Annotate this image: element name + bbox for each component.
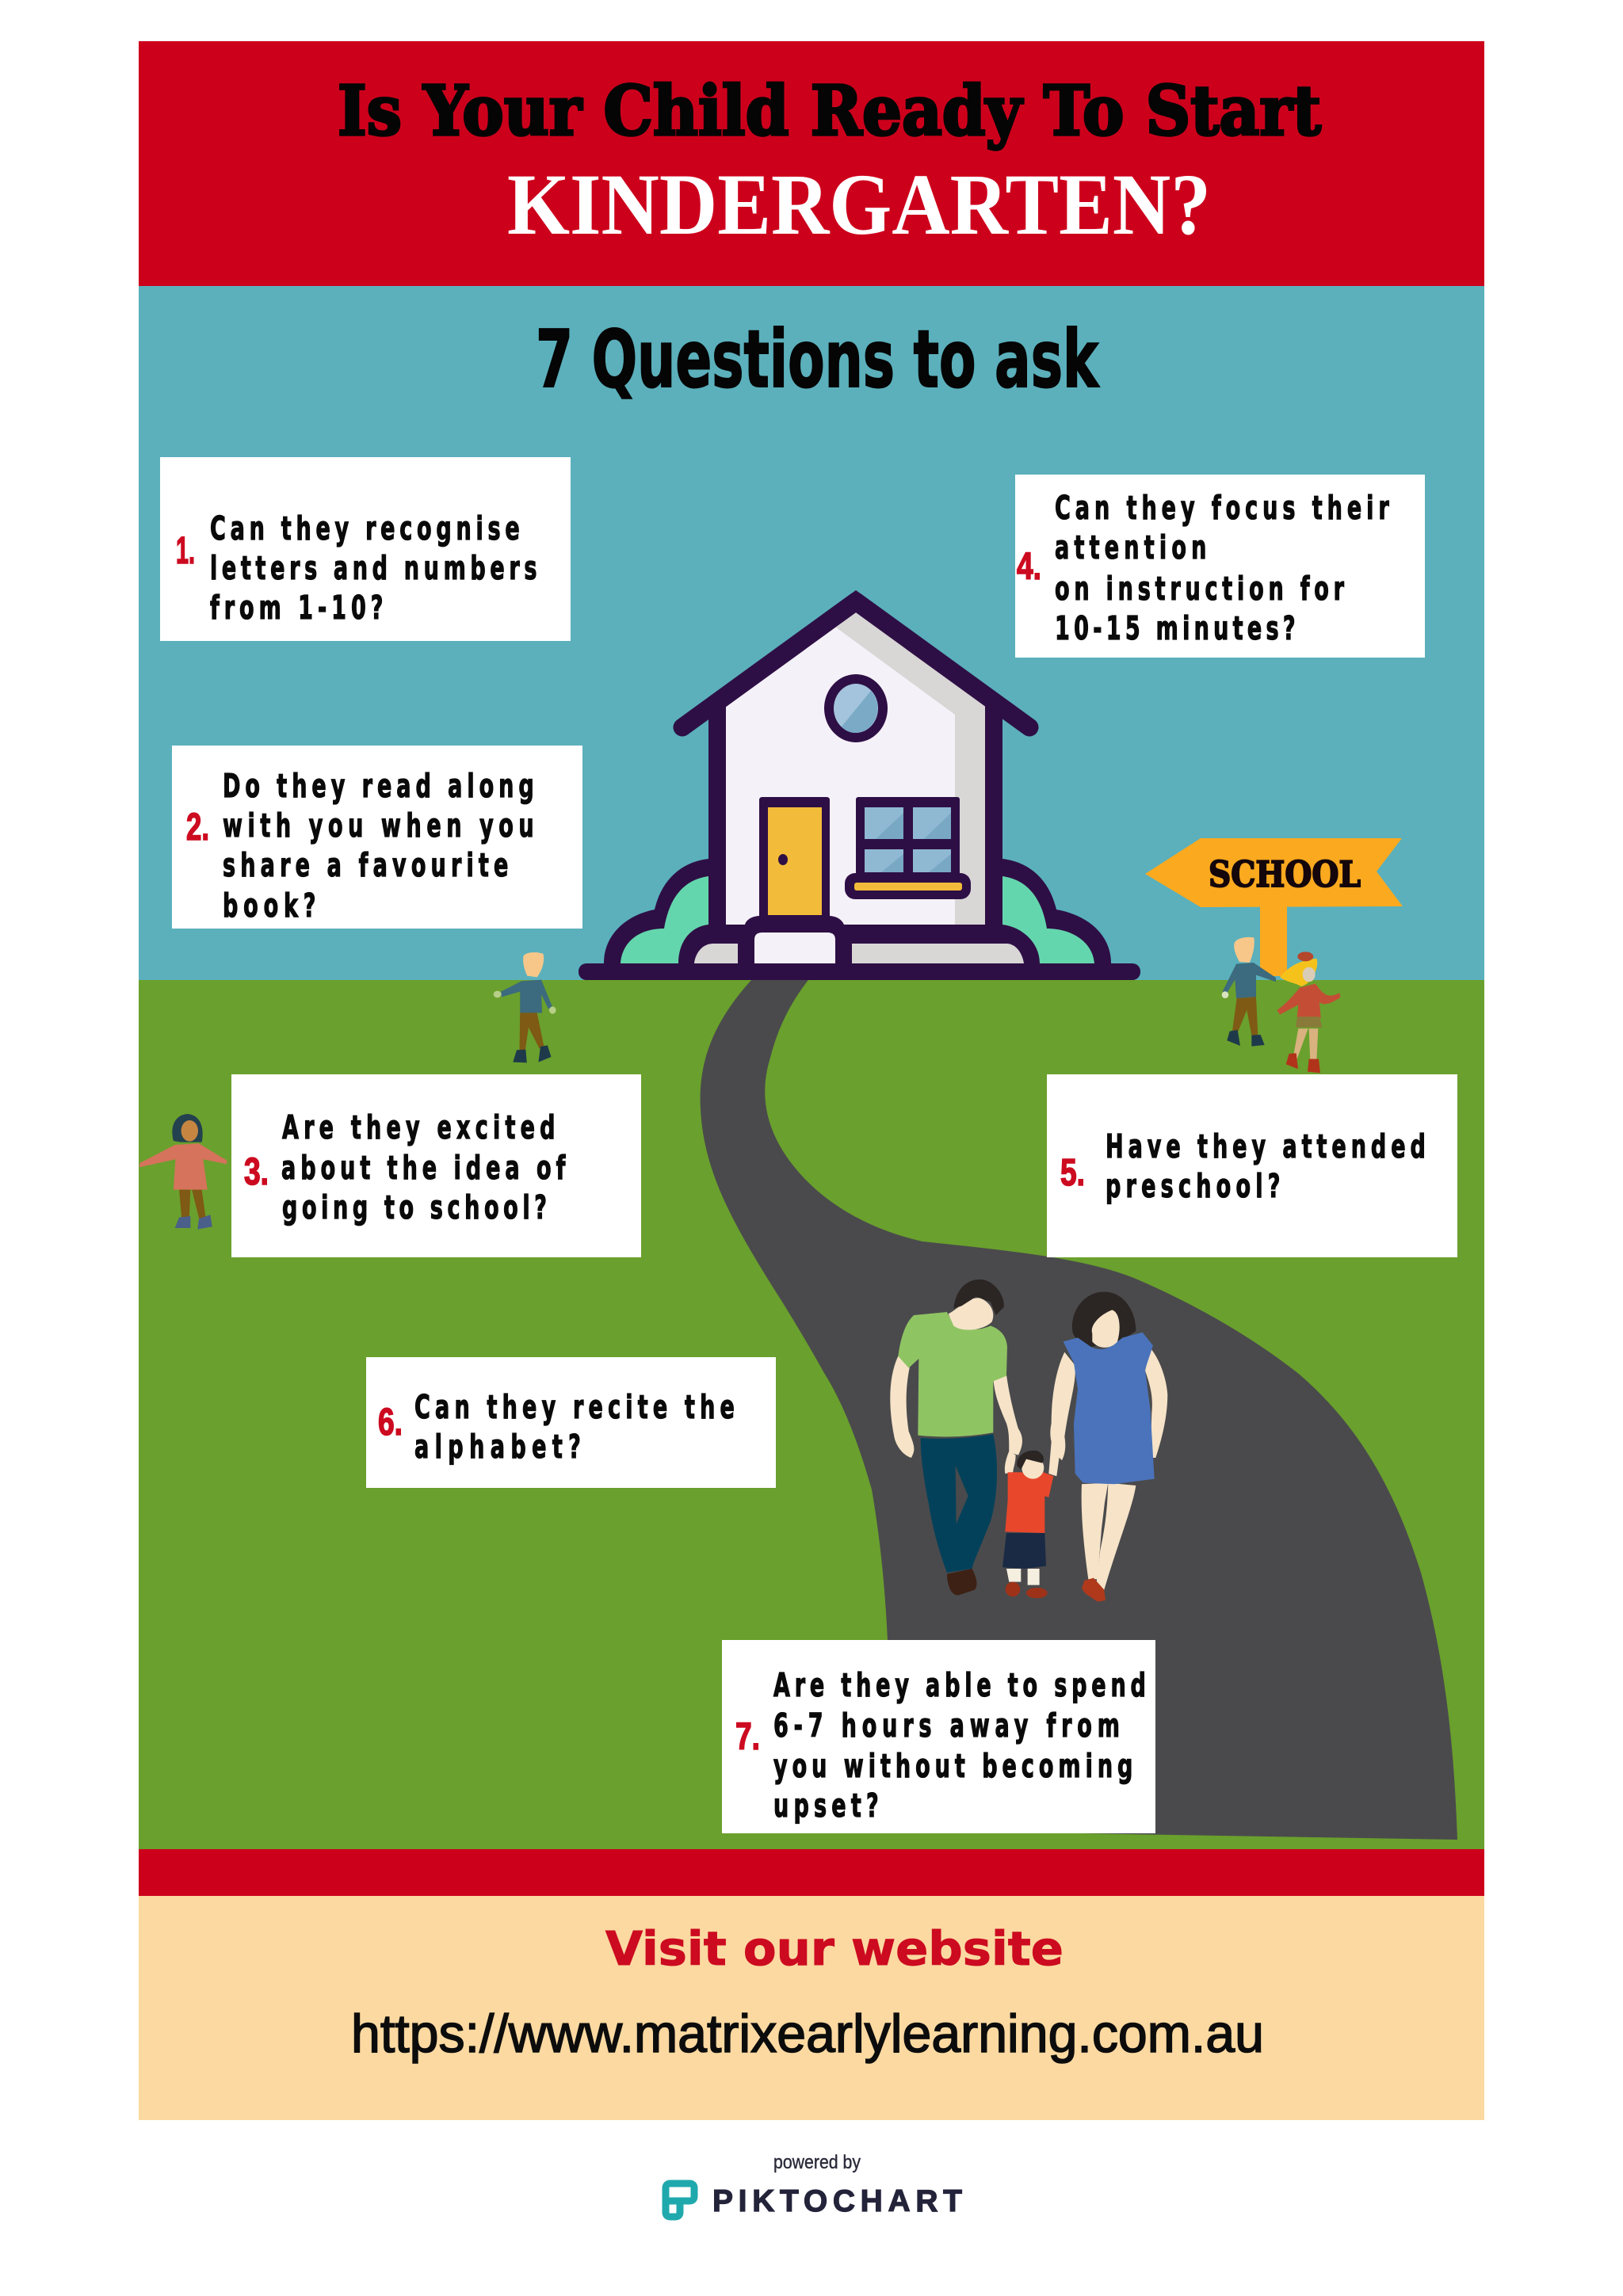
text (1106, 1128, 1426, 1206)
text (281, 1109, 566, 1227)
text (773, 1667, 1146, 1825)
number 2: 2. (186, 807, 209, 849)
text: Can they recite the (414, 1389, 735, 1427)
bushes (604, 859, 1111, 963)
card: question 6 (366, 1357, 776, 1488)
text: going to school? (282, 1189, 547, 1227)
text: letters and numbers (210, 550, 537, 588)
heading: visit our website: Visit our website (605, 1921, 1064, 1976)
piktochart wordmark: PIKTOCHART (712, 2184, 962, 2218)
card: question 3 (231, 1074, 641, 1257)
illustration: boy near sign (1222, 937, 1276, 1047)
number 4: 4. (1017, 546, 1041, 588)
text: share a favourite (223, 847, 508, 885)
text: preschool? (1106, 1168, 1280, 1206)
powered by: powered by (773, 2152, 861, 2173)
panel: sky (139, 286, 1484, 980)
text: Are they able to spend (773, 1667, 1146, 1705)
text: 6-7 hours away from (773, 1707, 1120, 1745)
text: Are they excited (282, 1109, 556, 1147)
illustration: girl near sign (1277, 952, 1341, 1073)
card: question 7 (722, 1640, 1155, 1833)
panel: website footer (139, 1896, 1484, 2120)
ground line (579, 963, 1140, 980)
text: Can they recognise (210, 510, 520, 548)
text (1055, 490, 1389, 648)
door (759, 797, 830, 919)
illustration: family walking (890, 1280, 1167, 1602)
text: Can they focus their (1055, 490, 1389, 528)
walls (708, 590, 1002, 931)
subtitle: 7 Questions to ask (536, 313, 1100, 406)
card: question 1 (160, 457, 571, 641)
text: about the idea of (281, 1150, 566, 1188)
steps and foundation (678, 916, 1040, 963)
number 5: 5. (1060, 1152, 1085, 1194)
text: book? (223, 887, 315, 925)
title: first line: Is Your Child Ready To Start (338, 71, 1321, 151)
number 1: 1. (176, 530, 195, 572)
text: from 1-10? (210, 589, 383, 627)
text (414, 1389, 735, 1466)
text: alphabet? (414, 1428, 581, 1466)
illustration: house (579, 590, 1140, 980)
text (223, 768, 534, 925)
text: with you when you (223, 807, 534, 845)
text (210, 510, 537, 627)
icon: piktochart logo (666, 2183, 694, 2217)
child (1002, 1442, 1060, 1598)
red divider band (139, 1849, 1484, 1896)
sign label: SCHOOL (1209, 853, 1361, 895)
round window (824, 674, 888, 742)
text: upset? (773, 1787, 879, 1825)
text: attention (1055, 529, 1206, 567)
card: question 2 (172, 746, 582, 929)
piktochart credit (666, 2152, 962, 2218)
text: on instruction for (1055, 570, 1345, 608)
number 7: 7. (735, 1716, 760, 1758)
illustration: school sign (1145, 838, 1403, 976)
text: Have they attended (1106, 1128, 1426, 1166)
text: you without becoming (773, 1748, 1132, 1786)
number 3: 3. (244, 1151, 269, 1193)
road (701, 980, 1457, 1840)
number 6: 6. (378, 1402, 403, 1444)
title: kindergarten: KINDERGARTEN? (507, 156, 1211, 253)
man (890, 1280, 1022, 1595)
website url: https://www.matrixearlylearning.com.au (351, 2004, 1264, 2064)
text: 10-15 minutes? (1055, 610, 1296, 648)
text: Do they read along (223, 768, 534, 806)
roof (682, 601, 1029, 727)
card: question 5 (1047, 1074, 1457, 1257)
panel: header banner (139, 41, 1484, 286)
illustration: boy on grass (494, 952, 556, 1062)
woman (1050, 1292, 1167, 1602)
card: question 4 (1015, 475, 1425, 658)
front window (845, 797, 971, 899)
illustration: girl on grass (139, 1114, 227, 1230)
panel: grass (139, 980, 1484, 1849)
